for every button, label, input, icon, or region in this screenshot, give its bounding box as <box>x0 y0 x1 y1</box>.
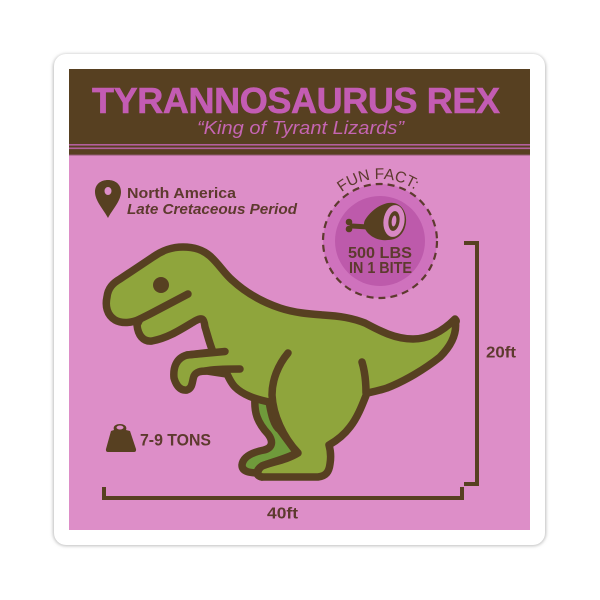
height bracket <box>464 243 477 484</box>
tail tip <box>450 316 460 326</box>
body fill and outline <box>106 247 456 477</box>
length label: 40ft <box>267 506 299 522</box>
location block <box>95 180 298 218</box>
lower arm line <box>205 369 240 371</box>
eye <box>153 277 169 293</box>
dinosaur <box>106 247 460 477</box>
header band <box>69 69 530 156</box>
location text: North America <box>127 185 237 202</box>
fun fact badge <box>322 168 438 300</box>
icon: ham <box>346 203 407 240</box>
far leg <box>242 395 297 473</box>
subtitle: “King of Tyrant Lizards” <box>197 118 405 138</box>
period text: Late Cretaceous Period <box>127 201 298 218</box>
weight text: 7-9 TONS <box>140 432 211 450</box>
length bracket <box>104 487 462 498</box>
height label: 20ft <box>486 344 517 362</box>
hip line <box>362 362 366 393</box>
sticker card <box>53 54 546 546</box>
fact text: 500 LBS <box>348 245 412 262</box>
mouth line <box>140 294 188 319</box>
fun fact badge: IN 1 BITE <box>349 260 412 277</box>
fun fact label: FUN FACT: <box>336 168 418 192</box>
icon: weight <box>106 424 136 452</box>
weight block <box>106 424 211 452</box>
upper arm line <box>187 352 225 355</box>
title: TYRANNOSAURUS REX <box>92 80 500 121</box>
thigh line <box>257 353 298 477</box>
pink panel <box>69 69 530 530</box>
icon: map pin <box>95 180 121 218</box>
